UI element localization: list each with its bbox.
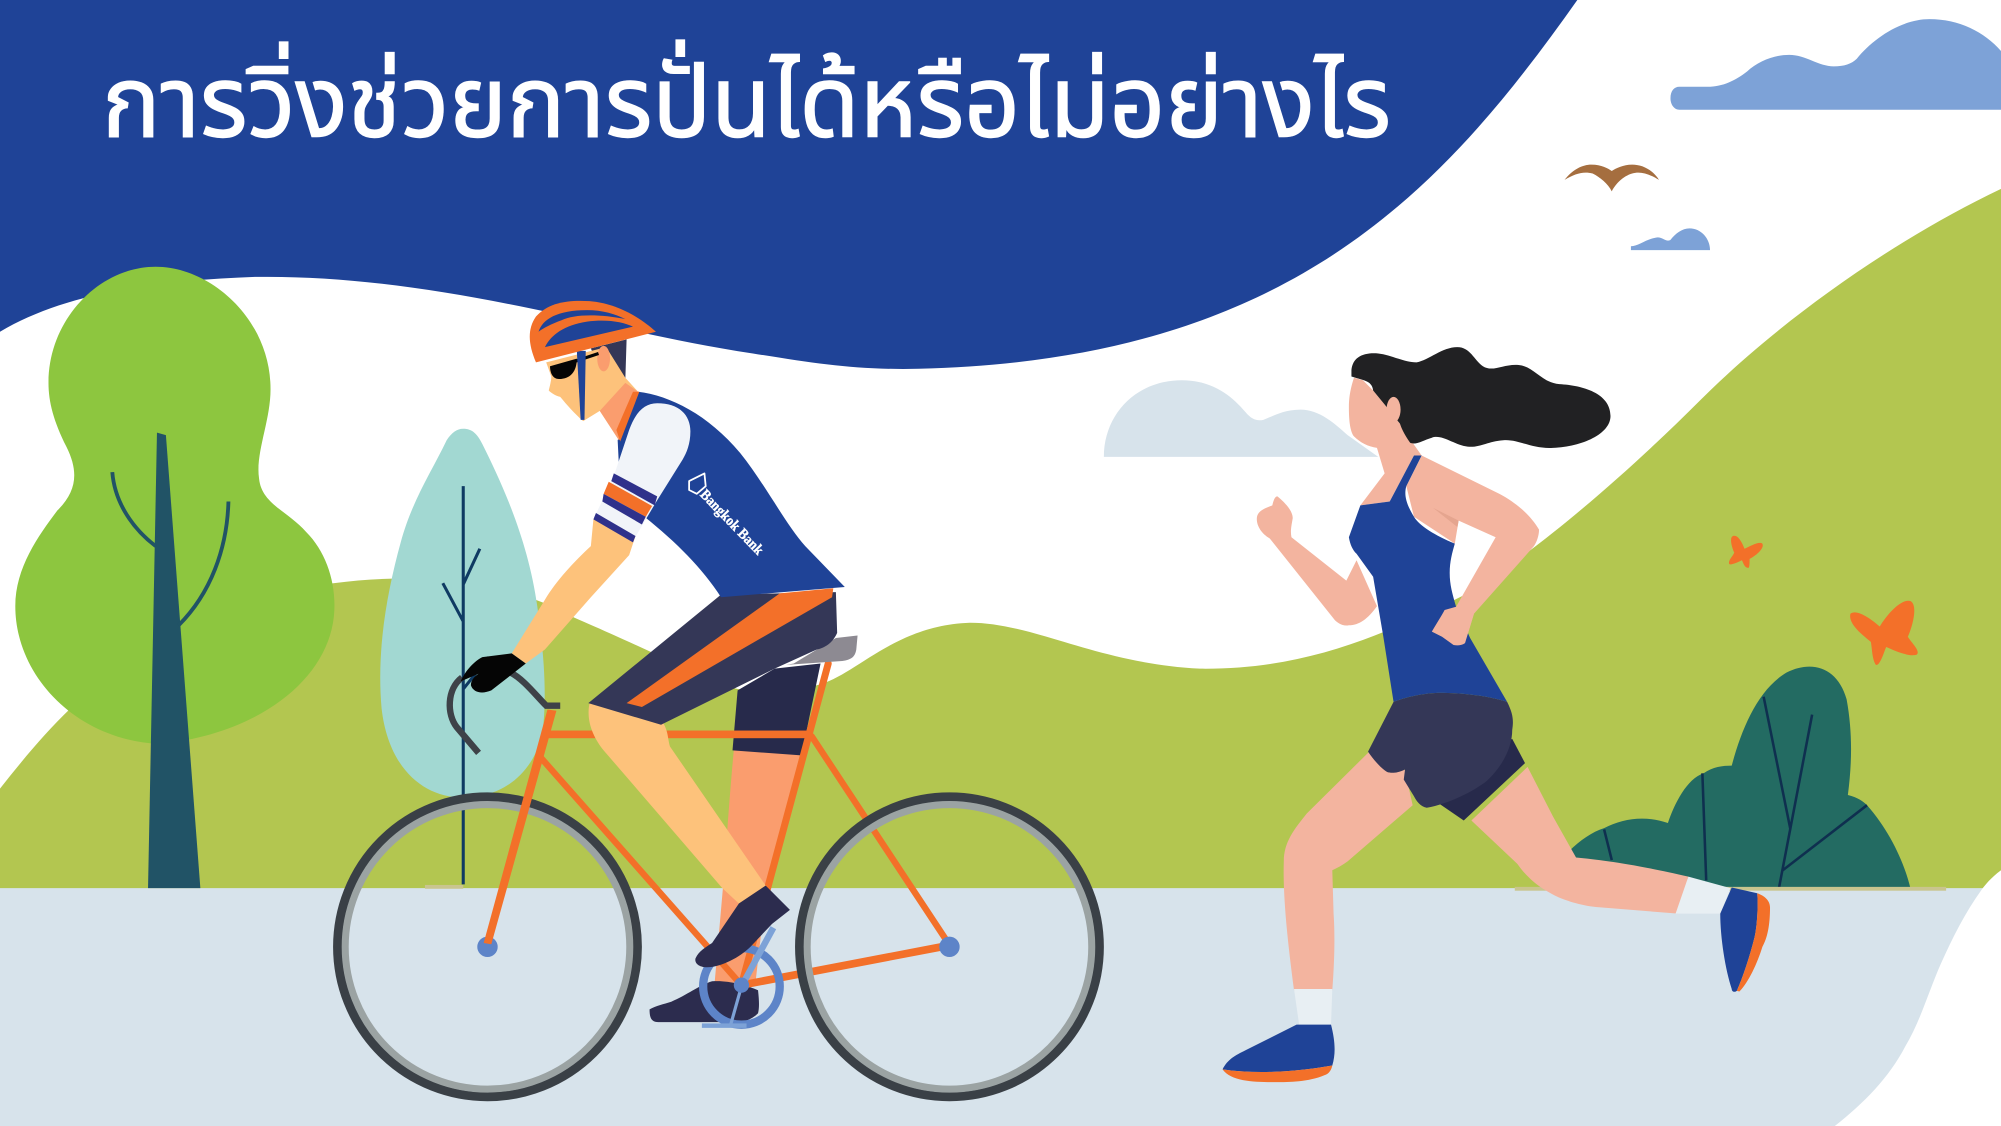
cyclist glove [461,653,526,692]
bicycle rear frame [541,664,948,985]
runner head, neck and chest [1349,378,1422,505]
road [0,888,2001,1126]
cyclist shorts [588,588,837,725]
saddle [786,635,858,665]
runner ear [1387,397,1401,422]
icon: bird [1565,165,1659,191]
crank ring and pedals [702,928,780,1028]
runner front leg [1223,752,1413,1082]
runner tank top [1349,456,1507,702]
road edge white curve [1834,870,2001,1126]
runner rear arm and shoulder [1406,456,1539,645]
bush [1540,667,1910,888]
cyclist arm [512,519,636,664]
cyclist sleeve [593,403,690,542]
cyclist jersey [618,392,845,597]
bicycle front wheel [338,797,637,1097]
cyclist back leg [650,664,821,1022]
bicycle handlebar [450,672,560,753]
bicycle fork and top tube [484,709,812,944]
tree: green [15,267,334,888]
cyclist front leg and shoe [589,703,790,967]
runner rear hand [1432,607,1474,645]
icon: butterfly large [1850,601,1918,665]
cloud: pale [1104,380,1378,457]
icon: butterfly small [1729,536,1763,568]
jersey logotype: Bangkok Bank [696,487,767,559]
title: การวิ่งช่วยการปั่นได้หรือไม่อย่างไร [102,40,1391,159]
hill: olive landscape [0,189,2001,893]
cyclist head [546,339,639,442]
runner hair [1351,347,1610,448]
blue title banner [0,0,1577,369]
cyclist helmet [530,301,656,362]
tree: teal [380,429,545,884]
ground strips [425,885,1946,891]
bicycle rear wheel [800,797,1099,1097]
runner forward arm [1257,496,1377,626]
cloud: small blue [1631,228,1710,250]
runner back leg [1471,767,1770,992]
cloud: large blue [1670,19,2001,110]
icon: bank logo [689,473,706,494]
runner shorts [1368,693,1525,821]
